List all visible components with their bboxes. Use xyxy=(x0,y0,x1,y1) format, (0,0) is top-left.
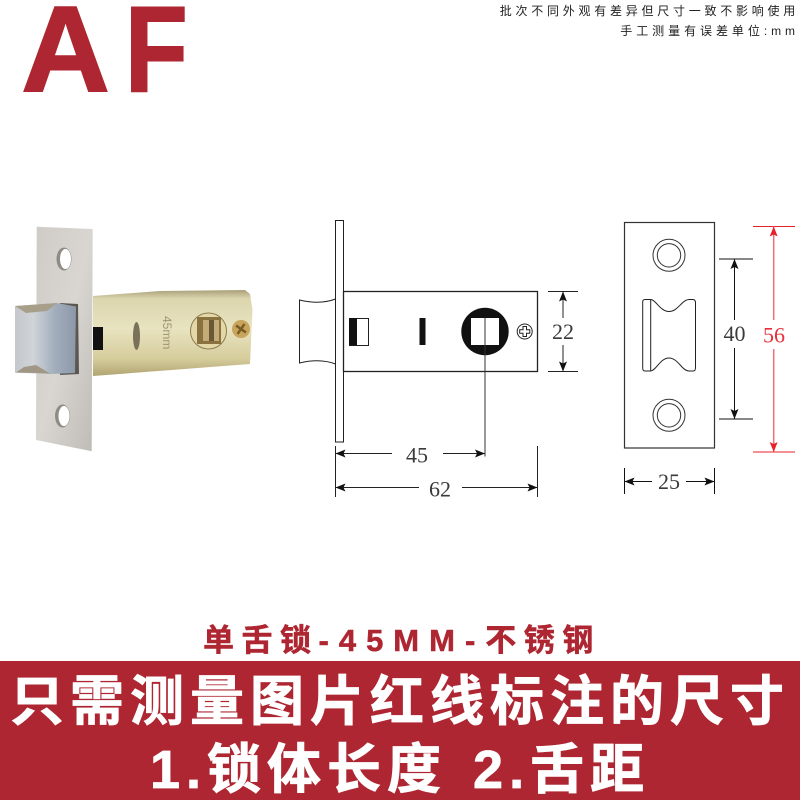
product title: 单舌锁-45MM-不锈钢 xyxy=(203,623,601,658)
banner xyxy=(0,661,800,800)
spindle xyxy=(461,308,509,456)
diagram: front view xyxy=(624,222,795,494)
dimension 62: 62 xyxy=(429,476,451,502)
banner background xyxy=(0,661,800,800)
dimension 56 in red: 56 xyxy=(763,322,785,348)
note: batch and measurement disclaimer xyxy=(500,3,799,38)
side view latch xyxy=(300,299,336,364)
square window xyxy=(93,327,103,350)
window xyxy=(349,318,368,346)
dimension 25 xyxy=(624,468,714,494)
banner line 1: 只需测量图片红线标注的尺寸 xyxy=(10,672,790,732)
banner line 2: 1.锁体长度 2.舌距 xyxy=(150,740,650,800)
dimension 45 xyxy=(336,442,538,497)
dimension 22: 22 xyxy=(552,319,574,344)
dimension 40: 40 xyxy=(724,321,746,346)
face plate xyxy=(36,227,93,451)
front plate xyxy=(624,222,714,448)
bottom hole xyxy=(653,399,685,431)
latch outline xyxy=(643,300,696,371)
dimension 56 in red xyxy=(753,226,795,452)
side view body xyxy=(344,292,538,372)
dimension 22 xyxy=(548,292,578,372)
slot xyxy=(420,318,426,345)
diagram: side view xyxy=(300,220,578,502)
top hole xyxy=(653,239,685,271)
logo: AF xyxy=(22,0,188,117)
plate screw holes xyxy=(55,248,72,428)
note: batch and measurement disclaimer: 手工测量有误差单位:mm xyxy=(620,23,799,38)
dimension 40 xyxy=(719,259,753,419)
lock body xyxy=(93,290,252,376)
note: batch and measurement disclaimer: 批次不同外观有差异但尺寸一致不影响使用 xyxy=(500,3,799,18)
slot xyxy=(133,322,140,350)
product photo: latch lock xyxy=(15,227,252,451)
size marking: 45mm xyxy=(160,316,174,349)
dimension 45: 45 xyxy=(406,442,428,468)
latch frame slot xyxy=(60,303,79,375)
dimension 25: 25 xyxy=(658,469,680,494)
side view plate xyxy=(336,220,344,442)
screw xyxy=(232,320,250,338)
latch bolt xyxy=(15,303,76,374)
screw xyxy=(517,324,532,339)
spindle hole xyxy=(190,313,226,349)
